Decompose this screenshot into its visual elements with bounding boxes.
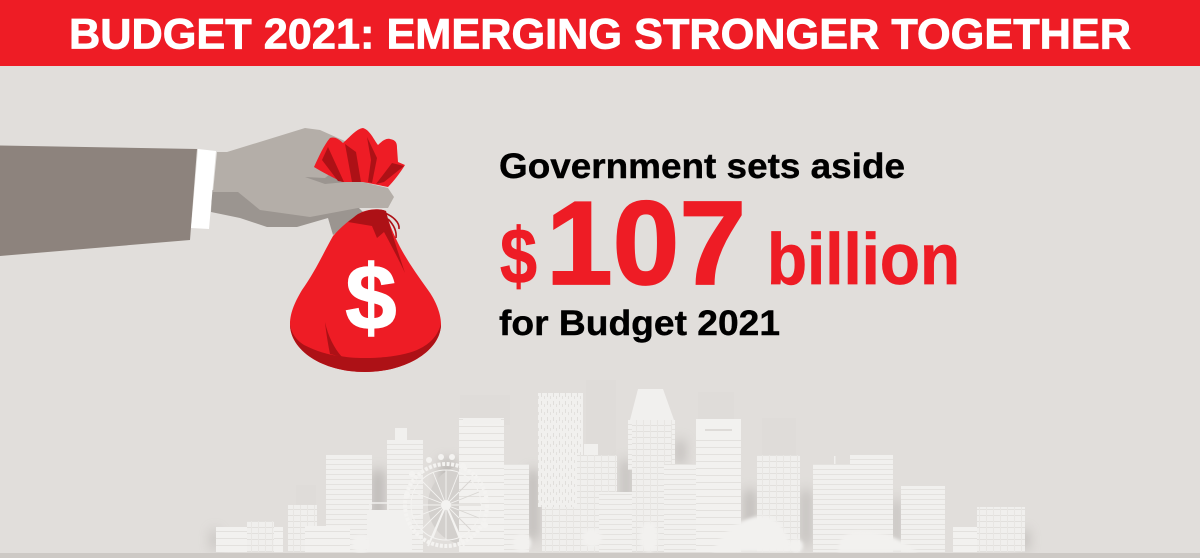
wheel backdrop bbox=[428, 466, 459, 544]
suit sleeve bbox=[0, 146, 197, 256]
bag bottom shading bbox=[290, 324, 441, 372]
illustration: hand holding money bag bbox=[0, 128, 441, 372]
low block far left bbox=[216, 521, 283, 552]
bag ruffle bbox=[314, 128, 405, 187]
lower hand in shadow bbox=[211, 190, 364, 235]
ruffle shading bbox=[322, 137, 404, 184]
amount: 107 bbox=[546, 177, 746, 310]
money bag body bbox=[290, 209, 441, 372]
left towers bbox=[288, 428, 423, 552]
lead-in line: Government sets aside bbox=[499, 147, 905, 186]
headline figure bbox=[499, 147, 960, 343]
finger shadow bbox=[305, 170, 346, 184]
ghost background towers bbox=[296, 380, 796, 510]
bag neck folds bbox=[348, 209, 405, 273]
central towers bbox=[459, 393, 638, 552]
tie strings bbox=[385, 213, 399, 238]
hand bbox=[213, 128, 394, 217]
closing line: for Budget 2021 bbox=[499, 304, 780, 343]
header band bbox=[0, 0, 1200, 66]
bag fold bbox=[325, 322, 342, 357]
trees and low domes bbox=[352, 516, 918, 553]
skyline bbox=[0, 380, 1200, 558]
title: BUDGET 2021: EMERGING STRONGER TOGETHER bbox=[69, 10, 1131, 58]
right towers bbox=[628, 389, 1025, 552]
dollar symbol: $ bbox=[500, 211, 537, 300]
ground strip bbox=[0, 553, 1200, 558]
unit: billion bbox=[767, 220, 960, 300]
dollar sign: $ bbox=[345, 247, 397, 349]
building shadows bbox=[212, 440, 1028, 550]
shirt cuff bbox=[191, 149, 216, 229]
ferris wheel bbox=[404, 454, 488, 546]
